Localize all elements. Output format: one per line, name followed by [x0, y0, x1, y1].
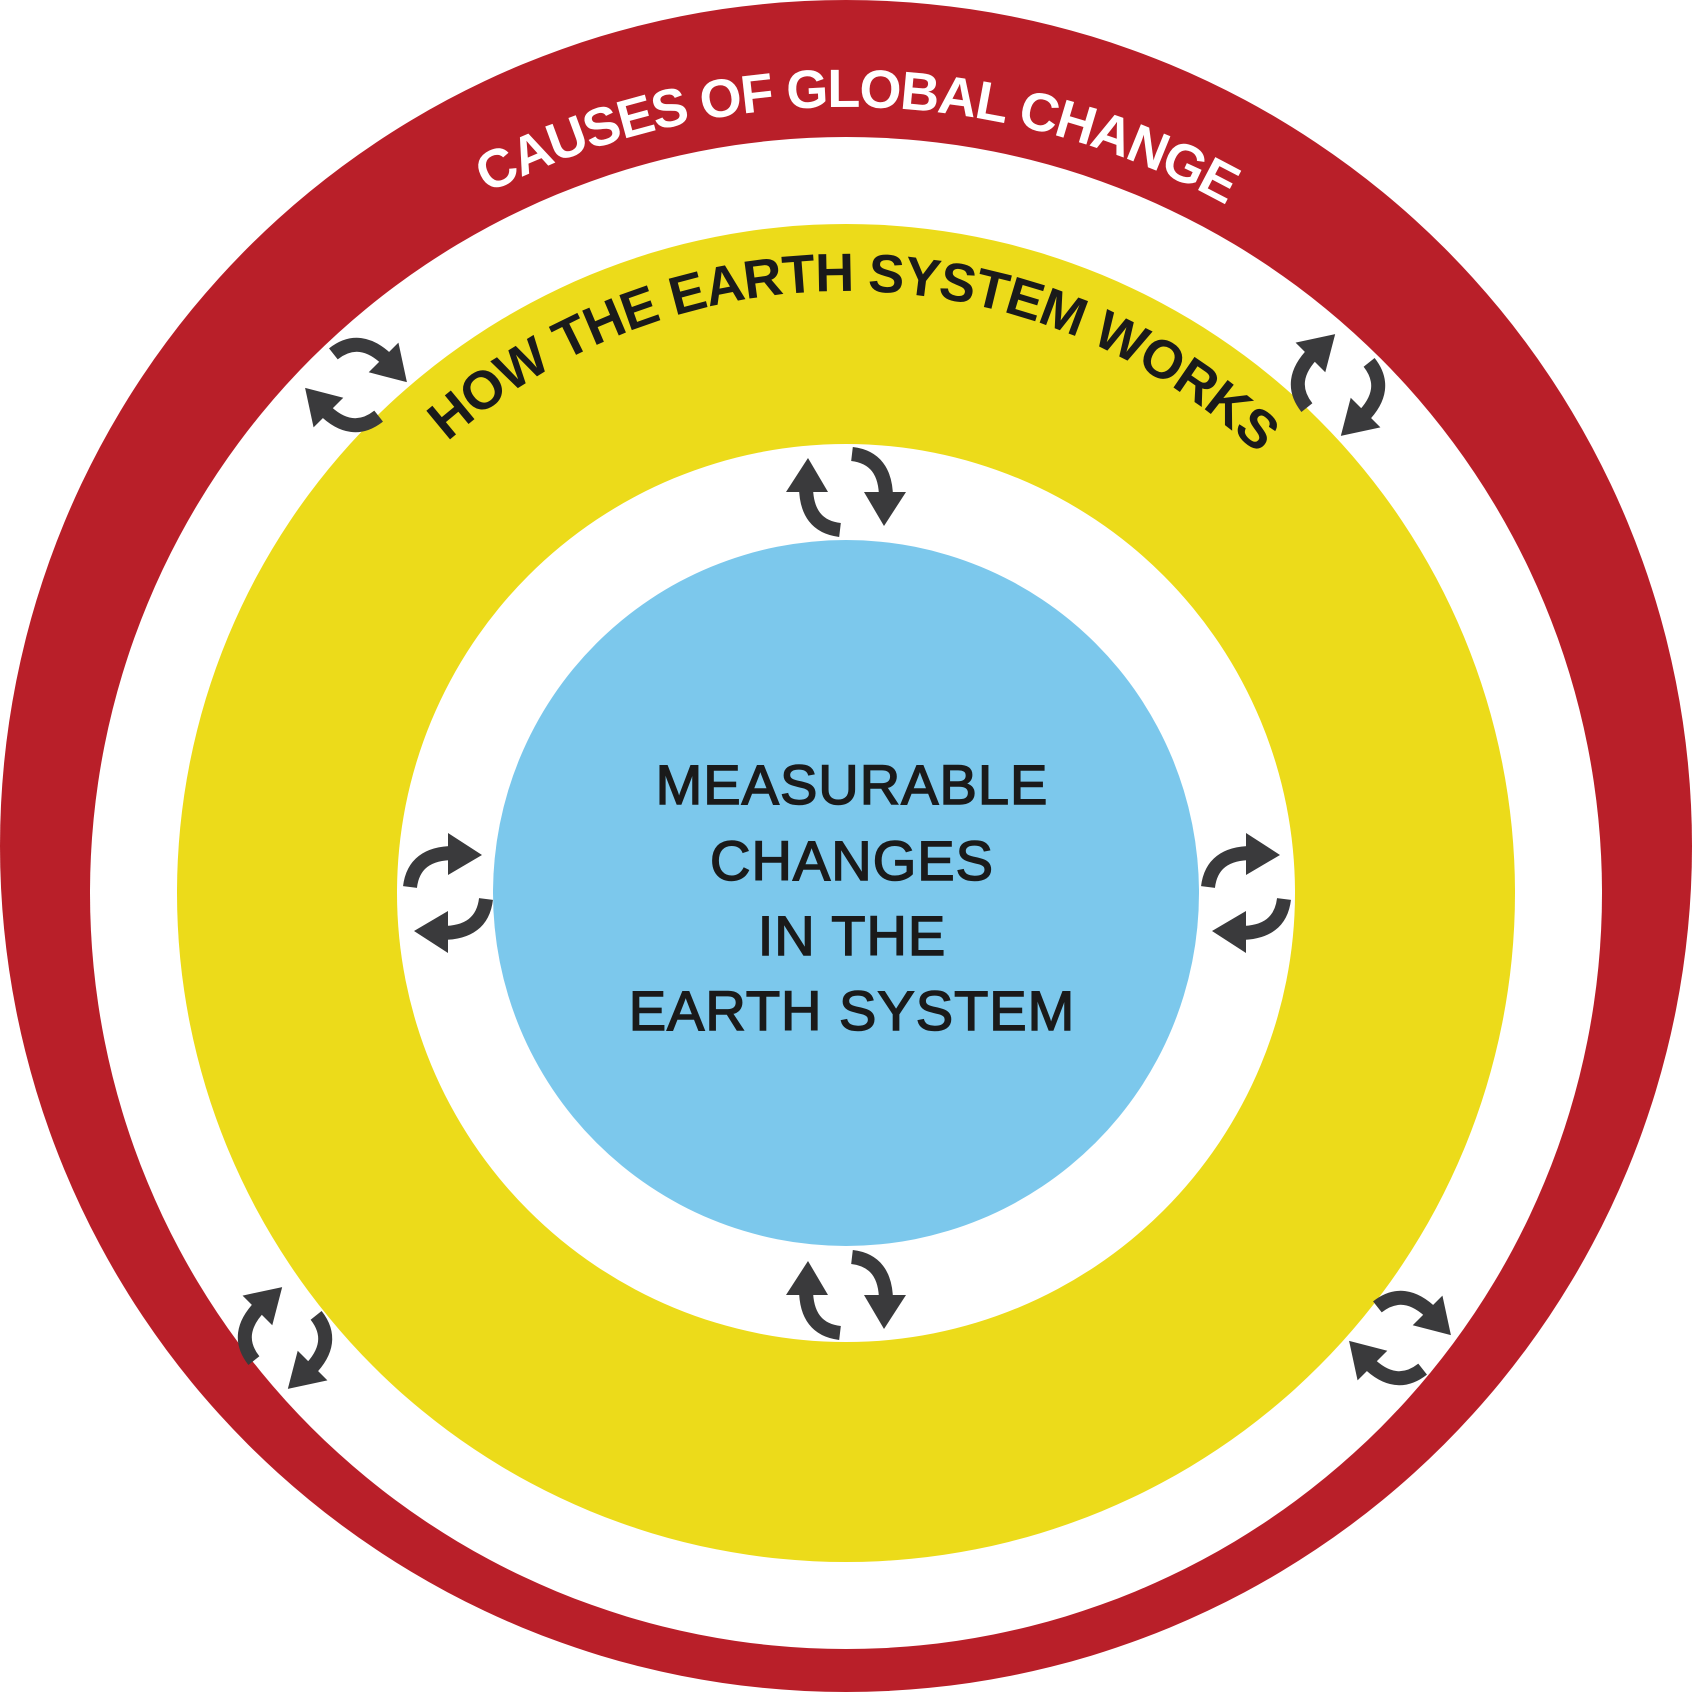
- feedback arrows: outer bottom-left: [216, 1269, 354, 1407]
- feedback arrows: inner left: [410, 833, 486, 953]
- red ring heading: CAUSES OF GLOBAL CHANGE: [478, 70, 1242, 204]
- blue center circle: [493, 540, 1199, 1246]
- feedback arrows: outer bottom-right: [1331, 1269, 1469, 1407]
- center text: EARTH SYSTEM: [629, 979, 1075, 1042]
- center text: MEASURABLE: [656, 753, 1048, 816]
- feedback arrows: inner top: [786, 454, 906, 530]
- center text: [629, 753, 1075, 1042]
- yellow ring: how the earth system works: [177, 224, 1515, 1562]
- feedback arrows: outer top-left: [287, 316, 425, 454]
- center text: IN THE: [758, 904, 946, 967]
- feedback arrows: inner bottom: [786, 1257, 906, 1333]
- yellow ring heading: HOW THE EARTH SYSTEM WORKS: [426, 254, 1277, 449]
- feedback arrows: outer top-right: [1269, 316, 1407, 454]
- feedback arrows: inner right: [1208, 833, 1284, 953]
- center text: CHANGES: [710, 829, 994, 892]
